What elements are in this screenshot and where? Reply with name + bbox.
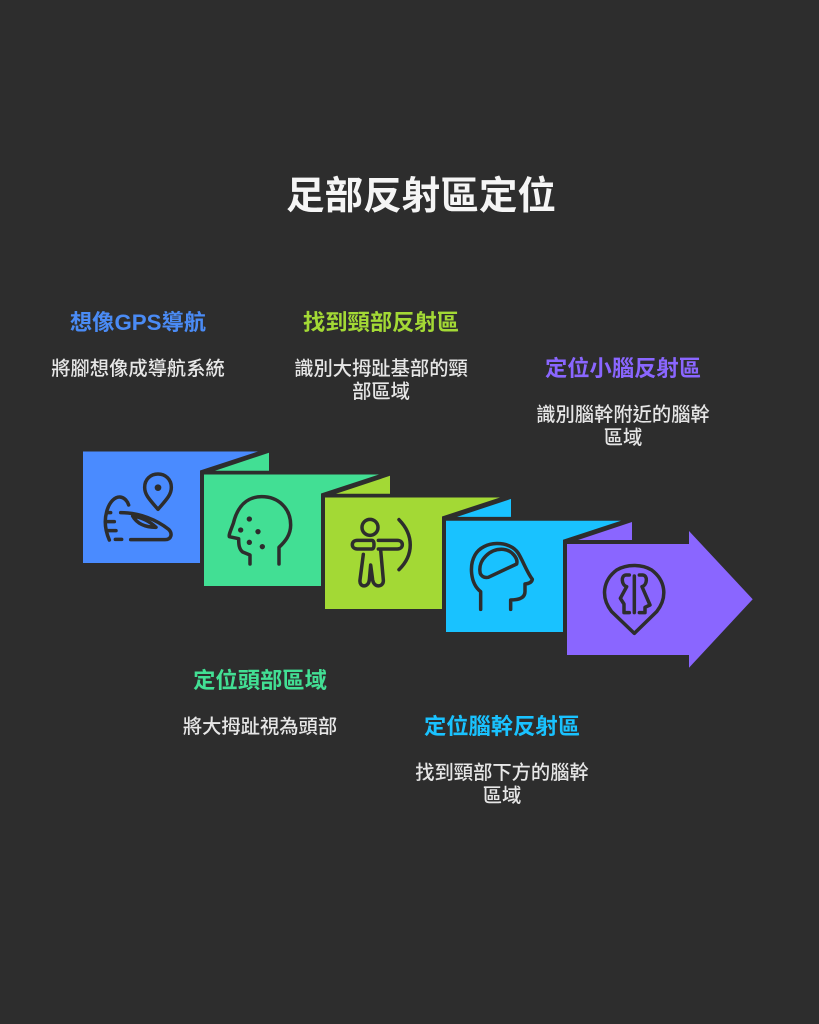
step 1 heading: 想像GPS導航 [70, 310, 206, 335]
step 3 heading: 找到頸部反射區 [303, 310, 459, 335]
title: 足部反射區定位 [286, 175, 556, 218]
icon: map pin and shoe [105, 474, 171, 540]
step 2 text: head area [183, 667, 337, 738]
panel: step 1 blue fold [83, 452, 258, 563]
step 4 description: 區域 [483, 785, 521, 807]
icon: head with brain [471, 544, 532, 609]
icon: archer [352, 519, 410, 586]
panel: step 4 cyan fold [446, 521, 621, 632]
step 4 heading: 定位腦幹反射區 [424, 713, 580, 739]
panel tab: lime [336, 476, 390, 494]
panel tab: green [215, 453, 269, 471]
step 3 description: 部區域 [352, 381, 410, 403]
step 5 description: 區域 [604, 427, 642, 449]
step 3 text: neck reflex [294, 310, 468, 403]
panel: step 2 green fold [204, 474, 379, 586]
panel: step 3 lime fold [325, 498, 500, 609]
step 1 text: GPS navigation [51, 310, 225, 380]
icon: head with dots [229, 497, 291, 564]
step 3 description: 識別大拇趾基部的頸 [294, 358, 468, 380]
step 5 heading: 定位小腦反射區 [545, 355, 701, 381]
icon: brain location pin [605, 565, 664, 633]
step 2 description: 將大拇趾視為頭部 [183, 716, 337, 738]
step 1 description: 將腳想像成導航系統 [51, 358, 225, 380]
panel tab: cyan [457, 499, 511, 517]
step 2 heading: 定位頭部區域 [193, 667, 327, 693]
panel tab: purple [578, 522, 632, 540]
step 5 text: cerebellum reflex [536, 355, 710, 449]
panel: step 5 purple arrow [567, 531, 753, 668]
step 4 text: brainstem reflex [415, 713, 589, 807]
step 5 description: 識別腦幹附近的腦幹 [536, 403, 710, 426]
step 4 description: 找到頸部下方的腦幹 [415, 761, 589, 784]
